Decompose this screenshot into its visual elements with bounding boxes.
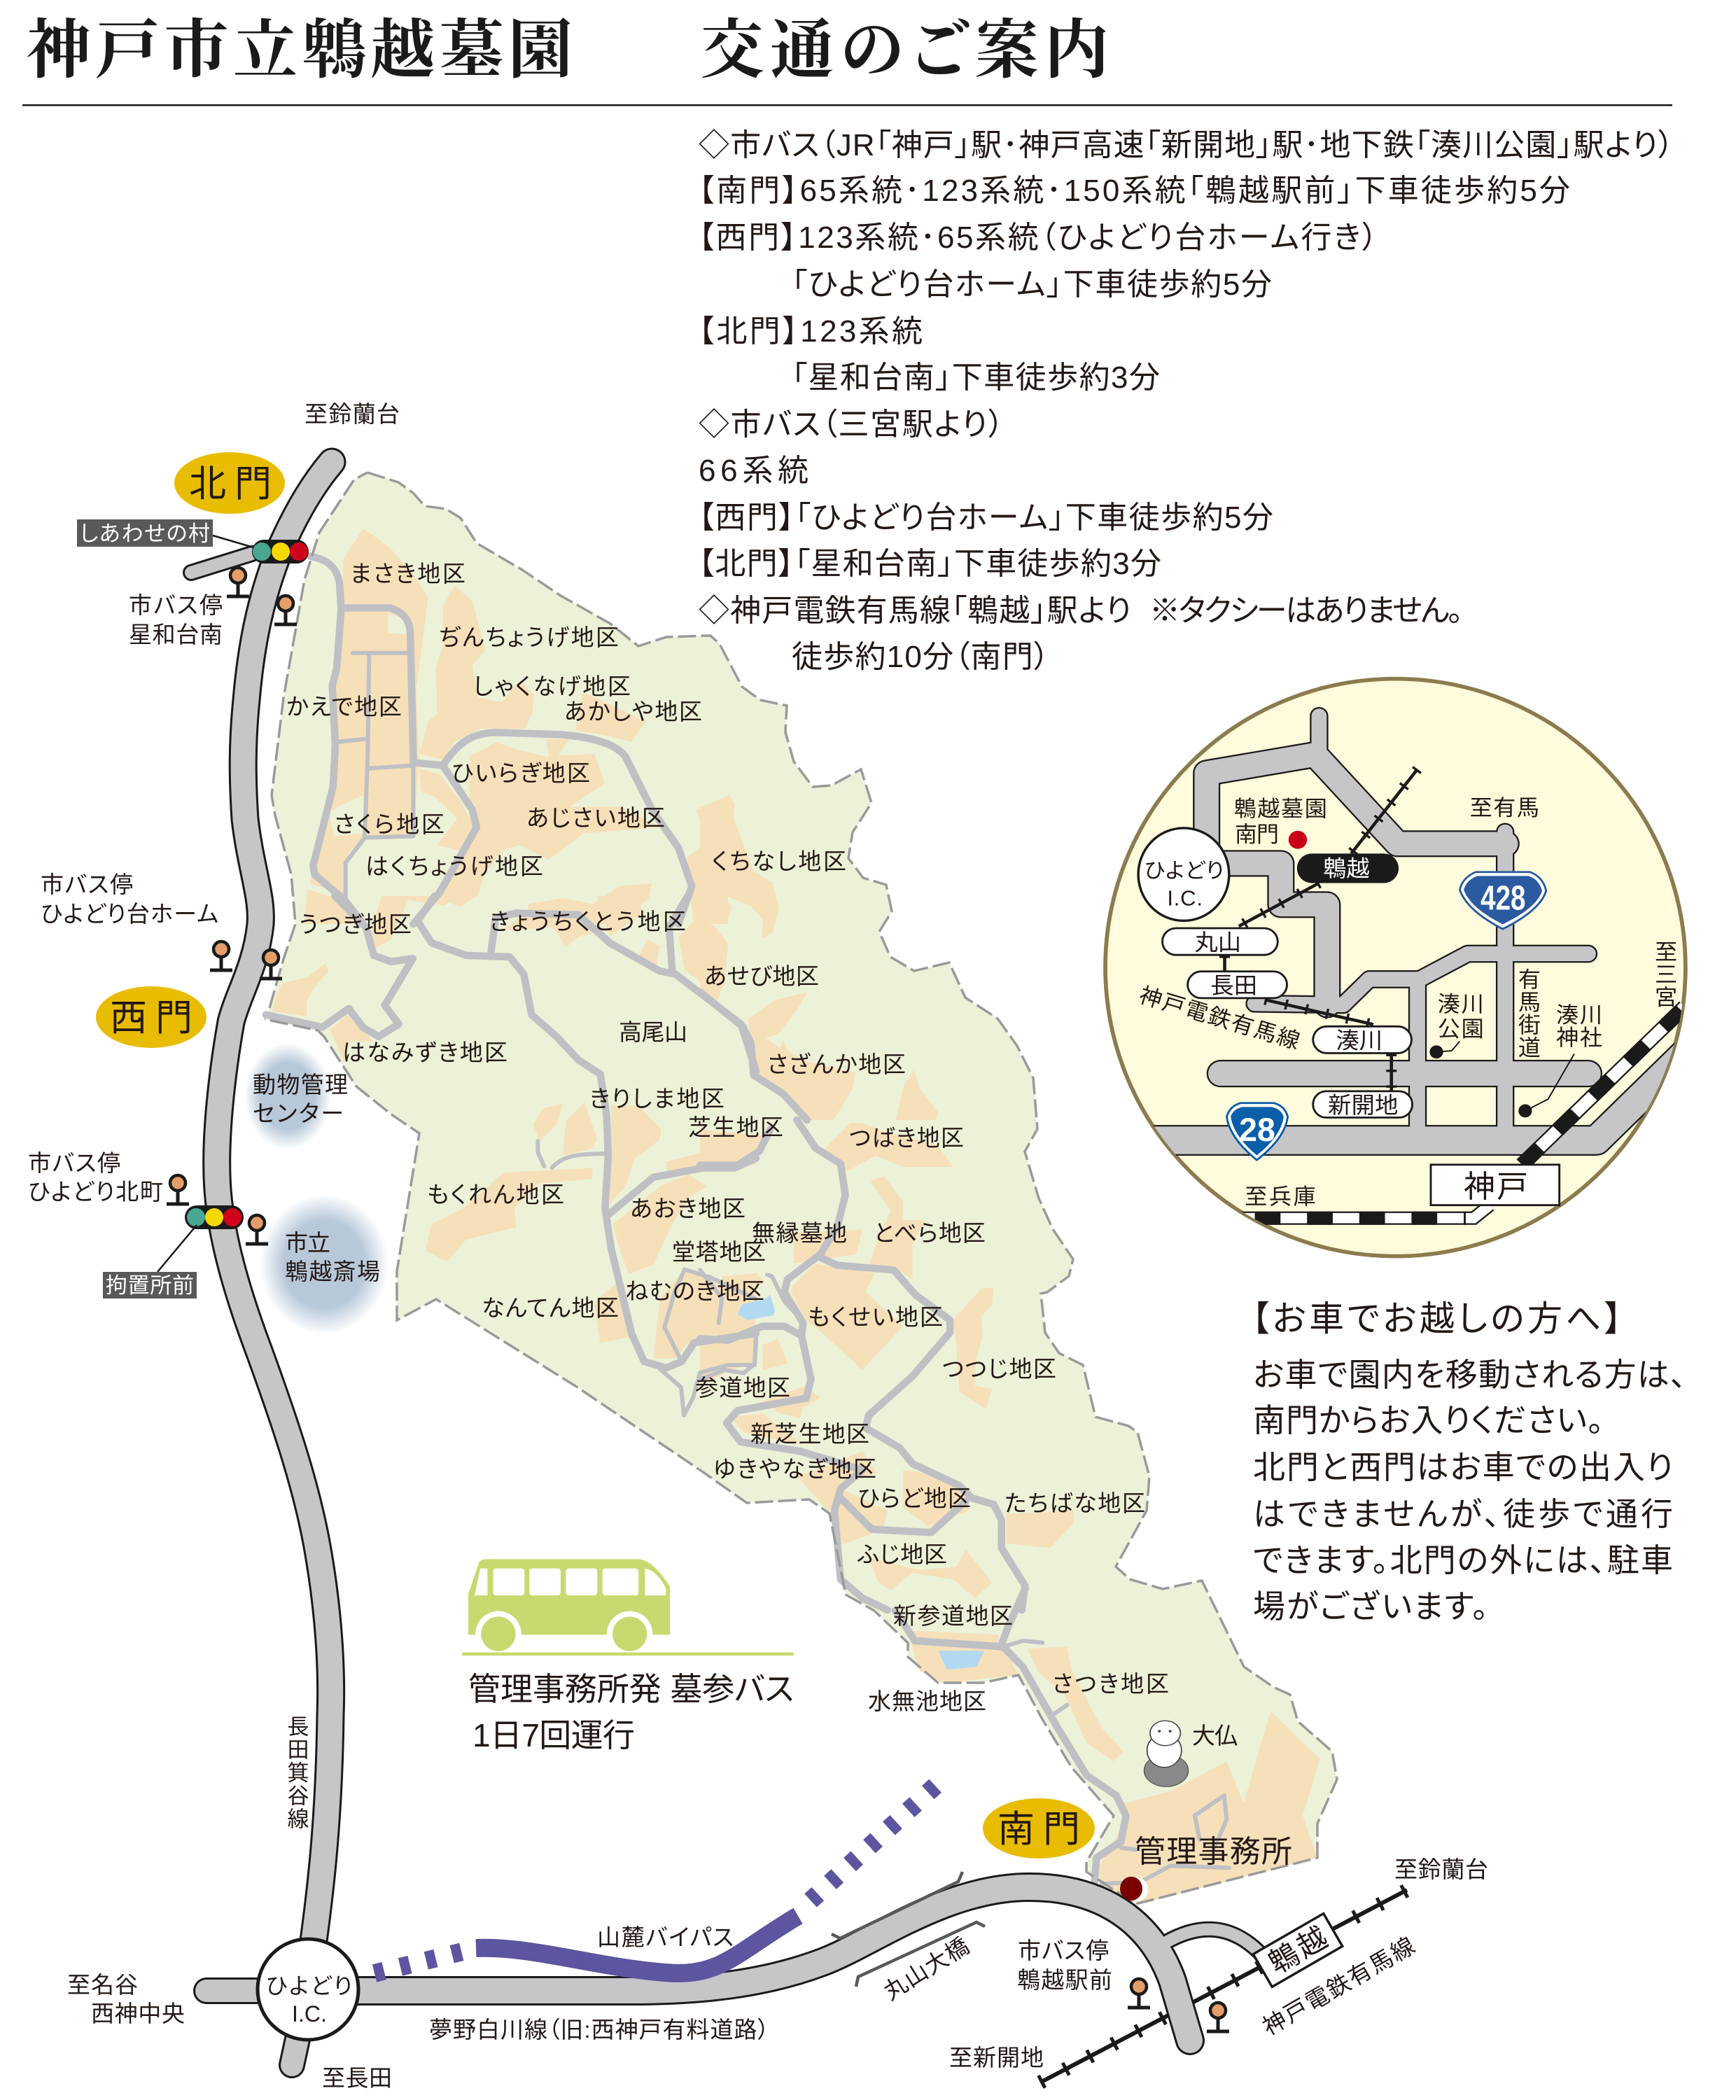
glow: animal management center [244,1043,331,1149]
Hiyodori interchange: ひよどり [1144,859,1224,883]
area labels: 神戸電鉄有馬線 [1136,982,1303,1054]
admin office label: 管理事務所 [1135,1835,1292,1869]
route 28 shield: 28 [1239,1112,1275,1149]
bus stops [167,568,1229,2031]
road and place labels: 西神中央 [91,2001,185,2026]
gate: west [96,986,206,1048]
text block: shuttle bus caption: 管理事務所発 墓参バス [468,1671,794,1707]
district labels: 水無池地区 [868,1688,986,1714]
route 428 shield [1460,872,1546,929]
text block: public transport directions: ◇神戸電鉄有馬線「鵯越」駅より [699,594,1131,628]
district labels: まさき地区 [350,561,465,587]
district labels: ゆきやなぎ地区 [713,1456,876,1482]
text block: public transport directions: 徒歩約10分（南門） [792,640,1049,674]
purple bypass [374,1780,941,1973]
area labels: 神社 [1556,1026,1602,1050]
district labels [286,561,1238,1749]
route 28 shield [1226,1103,1288,1160]
glow: crematorium [260,1194,388,1334]
interchange circle [258,1939,358,2040]
internal cemetery roads [266,556,1229,1888]
road and place labels: 市バス停 [129,592,223,618]
interchange circle: I.C. [292,2001,327,2026]
station pill: Shinkaichi [1313,1091,1413,1118]
circle background [1105,679,1686,1256]
gate: south [983,1798,1095,1858]
district labels: くちなし地区 [712,848,846,874]
district labels: たちばな地区 [1004,1490,1145,1516]
district labels: あじさい地区 [526,805,665,831]
station box: Hiyodorigoe: 鵯越 [1263,1921,1333,1980]
text block: public transport directions: ◇市バス（三宮駅より） [699,407,1004,442]
district labels: 高尾山 [619,1019,687,1045]
text block: public transport directions: ※タクシーはありません。 [1149,594,1463,628]
area roads [1118,716,1693,1140]
road and place labels: 夢野白川線（旧:西神戸有料道路） [429,2017,769,2043]
district labels: 新参道地区 [893,1603,1013,1629]
Kobe station box: 神 戸 [1464,1170,1528,1204]
district labels: しゃくなげ地区 [473,673,631,699]
station box: Hiyodorigoe [1253,1914,1343,1987]
district labels: なんてん地区 [482,1295,619,1321]
landmark leaders [1430,1042,1574,1116]
interchange circle: ひよどり [266,1973,352,1998]
road and place labels: 市バス停 [28,1150,120,1176]
district labels: とべら地区 [874,1220,986,1246]
title: access guide: 交通のご案内 [700,0,1109,91]
text block: public transport directions: 【北門】123系統 [699,314,923,349]
pond: central [738,1295,775,1320]
text block: notice for drivers: できます。北門の外には、駐車 [1253,1542,1673,1578]
gate: south: 南門 [997,1809,1080,1850]
road and place labels: 市バス停 [1018,1938,1109,1963]
Hiyodori interchange: I.C. [1167,887,1203,910]
district labels: うつぎ地区 [299,911,412,937]
district labels: もくれん地区 [427,1182,564,1208]
district labels: あせび地区 [704,963,819,989]
text block: public transport directions: 【西門】「ひよどり台ホーム」下車徒歩約5分 [699,500,1273,535]
road and place labels: 至長田 [322,2065,392,2091]
area labels: 湊川 [1556,1002,1602,1028]
road and place labels: 鵯越駅前 [1017,1967,1112,1993]
district labels: さつき地区 [1052,1671,1169,1697]
district labels: 大仏 [1192,1723,1238,1749]
JR line east [1522,1007,1685,1165]
Kobe Electric railway segments [1225,769,1418,1091]
text block: public transport directions: ◇市バス（JR「神戸」駅･神戸高速「新開地」駅･地下鉄「湊川公園」駅より） [699,128,1674,162]
road and place labels: 至鈴蘭台 [304,401,400,427]
district labels: もくせい地区 [808,1304,943,1330]
road and place labels [28,401,1488,2091]
station pill: Maruyama: 丸山 [1194,930,1241,955]
south gate marker: 鵯越墓園 [1234,796,1327,821]
Hiyodori interchange [1138,828,1229,920]
text block: notice for drivers: 北門と西門はお車での出入り [1253,1449,1673,1485]
district labels: きょうちくとう地区 [489,909,686,934]
text block: notice for drivers: はできませんが、徒歩で通行 [1253,1496,1673,1532]
road and place labels: 至鈴蘭台 [1394,1856,1488,1882]
station pill: Nagata [1188,972,1287,998]
road and place labels: 神戸電鉄有馬線 [1258,1932,1419,2040]
road and place labels: 丸山大橋 [879,1933,974,2005]
text block: public transport directions: 66系統 [699,454,808,488]
station pill: Minatogawa [1313,1026,1411,1054]
district labels: つつじ地区 [942,1356,1056,1382]
district labels: つばき地区 [849,1125,964,1151]
text block: notice for drivers: 場がございます。 [1253,1588,1488,1625]
text block: public transport directions: 【西門】123系統･65系統（ひよどり台ホーム行き） [699,220,1378,255]
header rule [22,104,1672,106]
text block: shuttle bus caption: 1日7回運行 [472,1717,635,1754]
road and place labels: 動物管理 [253,1072,348,1098]
district labels: 無縁墓地 [752,1220,847,1246]
gate: north: 北門 [189,463,272,505]
admin office marker [1120,1877,1148,1901]
station pill: Minatogawa: 湊川 [1336,1028,1382,1054]
road and place labels: 山麓バイパス [597,1924,734,1950]
station pill: Hiyodorigoe [1297,853,1399,883]
road and place labels: ひよどり北町 [28,1179,163,1205]
district labels: さざんか地区 [767,1051,906,1077]
district labels: はくちょうげ地区 [365,853,543,879]
district labels: ひいらぎ地区 [451,760,590,786]
JR line west [1239,1205,1490,1218]
park boundary dashed [265,472,1337,1904]
label: detention house [103,1225,197,1298]
text block: notice for drivers: お車で園内を移動される方は、 [1253,1357,1686,1393]
road and place labels: センター [253,1100,344,1126]
road and place labels: 鵯越斎場 [285,1259,380,1284]
panel: circular area map [1105,679,1693,1256]
route 428 shield: 428 [1480,878,1525,918]
pond: mizunashi [939,1651,984,1670]
district labels: ふじ地区 [857,1541,947,1567]
label: shiawase village: しあわせの村 [80,522,210,546]
area labels: 至兵庫 [1245,1184,1316,1209]
gate: west: 西門 [110,997,192,1039]
station pill: Shinkaichi: 新開地 [1328,1092,1398,1118]
station pill: Nagata: 長田 [1210,973,1257,998]
text block: notice for drivers: 南門からお入りください。 [1253,1402,1604,1438]
orange burial zones [272,528,1320,1904]
station pill: Hiyodorigoe: 鵯越 [1323,855,1370,881]
road and place labels: 市バス停 [41,872,133,897]
south gate marker: 南門 [1235,822,1279,846]
text block: public transport directions: 【南門】65系統･123系統･150系統「鵯越駅前」下車徒歩約5分 [699,174,1570,208]
area labels: 公園 [1438,1016,1484,1041]
text block: public transport directions [699,128,1674,674]
district labels: ねむのき地区 [625,1278,764,1304]
text block: notice for drivers: 【お車でお越しの方へ】 [1252,1299,1622,1338]
district labels: ひらど地区 [858,1485,971,1511]
title: cemetery name: 神戸市立鵯越墓園 [27,0,573,91]
district labels: あおき地区 [630,1196,746,1222]
label: detention house: 拘置所前 [106,1273,194,1298]
icon: great buddha [1144,1721,1189,1786]
gate: north [174,452,285,514]
text block: shuttle bus caption [468,1671,794,1754]
district labels: かえで地区 [286,694,402,720]
area labels: 至有馬 [1470,795,1539,820]
station pill: Maruyama [1163,928,1278,955]
area labels: 至三宮 [1652,940,1677,1008]
district labels: 芝生地区 [688,1114,783,1140]
text block: public transport directions: 「星和台南」下車徒歩約3分 [792,360,1160,395]
text block: public transport directions: 「ひよどり台ホーム」下車徒歩約5分 [792,267,1272,302]
bridge brackets [832,1872,985,1987]
road and place labels: ひよどり台ホーム [41,901,218,927]
railway: Kobe Electric Arima line [1040,1890,1407,2082]
signal: north gate [252,540,309,564]
district labels: 新芝生地区 [750,1421,869,1447]
park area fill [265,472,1337,1904]
area labels [1136,795,1677,1209]
area labels: 湊川 [1438,991,1484,1016]
label: shiawase village [77,519,253,547]
icon: shuttle bus [460,1559,794,1667]
signal: west [185,1205,244,1229]
road and place labels: 星和台南 [129,622,223,648]
district labels: ぢんちょうげ地区 [439,624,619,650]
road and place labels: 至新開地 [949,2045,1044,2071]
district labels: はなみずき地区 [342,1040,507,1065]
road and place labels: 長田箕谷線 [284,1715,309,1830]
panel: cemetery grounds map [265,472,1337,1904]
Kobe station box [1431,1165,1560,1205]
text block: notice for drivers [1252,1299,1686,1625]
road and place labels: 至名谷 [67,1972,138,1998]
district labels: きりしま地区 [589,1086,724,1112]
district labels: 堂塔地区 [672,1239,766,1265]
district labels: さくら地区 [334,811,444,837]
main roads [191,462,1260,2065]
area labels: 有馬街道 [1516,967,1541,1058]
text block: public transport directions: 【北門】「星和台南」下車徒歩約3分 [699,547,1161,581]
district labels: あかしや地区 [564,699,702,724]
road and place labels: 市立 [285,1230,330,1256]
south gate marker [1234,796,1327,849]
district labels: 参道地区 [695,1375,790,1401]
